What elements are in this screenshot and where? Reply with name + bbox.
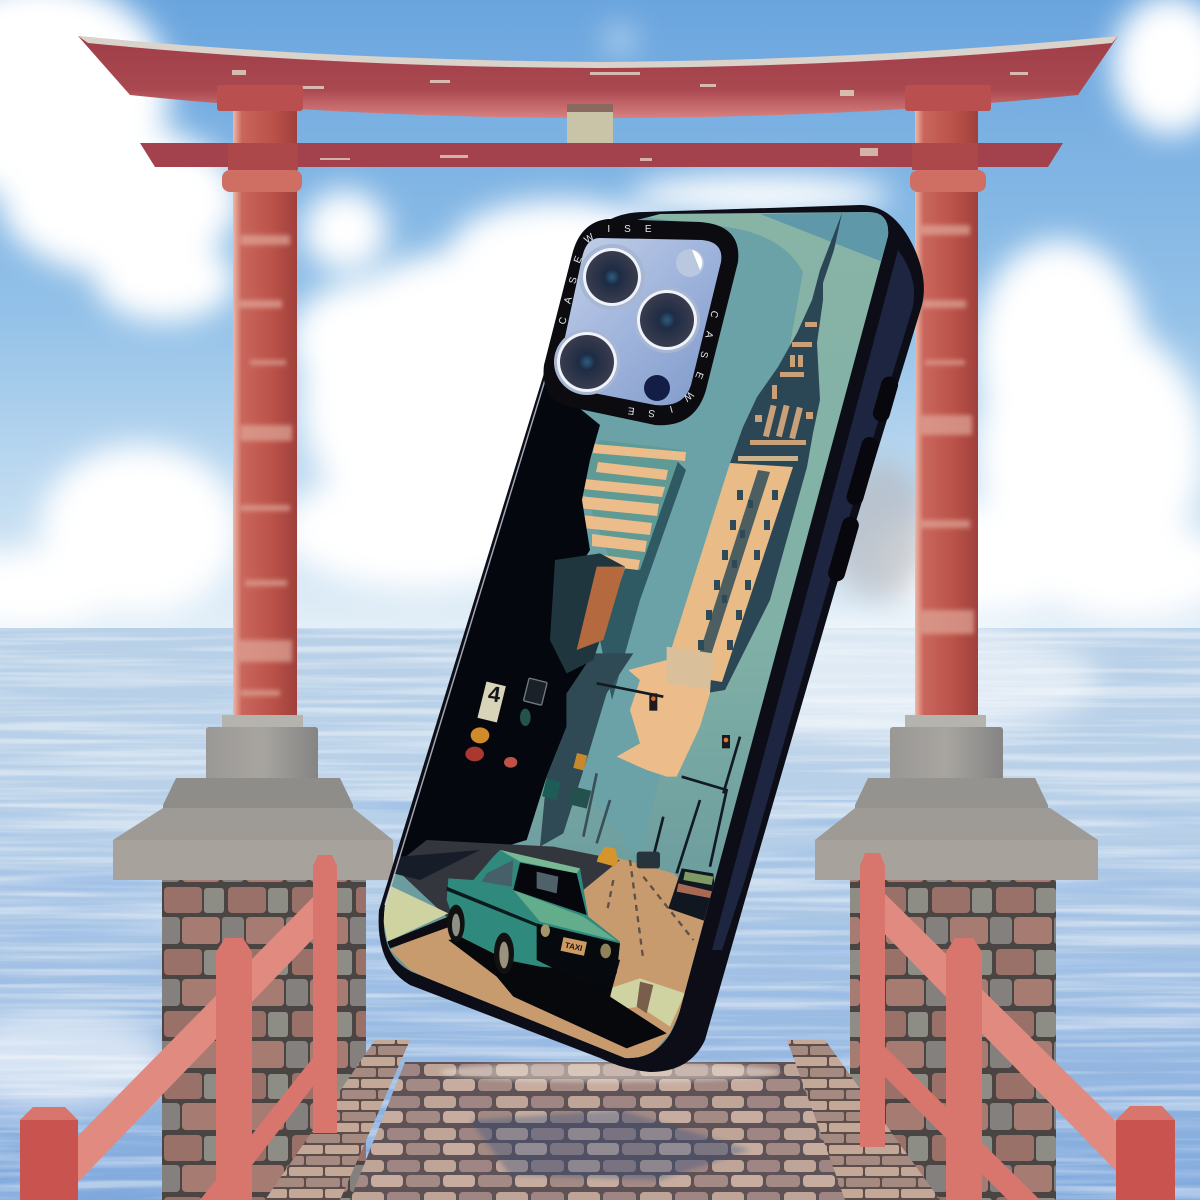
lower beam bbox=[140, 143, 1063, 167]
case body bbox=[379, 205, 924, 1072]
brand text on island: CASEWISE bbox=[559, 225, 652, 324]
art: distant striped building bbox=[578, 440, 686, 700]
centre strut bbox=[567, 104, 613, 143]
brand text on island bbox=[559, 225, 718, 418]
case side reflection bbox=[712, 250, 914, 950]
camera island bbox=[544, 219, 738, 426]
art: teal car: TAXI bbox=[564, 941, 583, 953]
art: teal car bbox=[446, 850, 620, 974]
sky background bbox=[0, 0, 1200, 630]
stone walkway bbox=[265, 1040, 940, 1200]
right stone base bbox=[815, 715, 1098, 1200]
art: dark building silhouette bbox=[398, 382, 600, 860]
pillar caps bbox=[217, 85, 991, 192]
art: dark red car bbox=[668, 868, 715, 922]
art: sunlit tan blocks bbox=[617, 653, 712, 777]
art: main tower bbox=[664, 213, 842, 700]
art: blue sky shapes bbox=[560, 212, 890, 860]
brand text on island: CASEWISE bbox=[628, 311, 718, 418]
art: teal car shadow bbox=[448, 927, 667, 1048]
art: yellow taxi in distance bbox=[597, 847, 660, 868]
grey cloud shadow behind phone bbox=[830, 460, 930, 600]
phone case bbox=[378, 205, 924, 1072]
clouds bbox=[0, 0, 1200, 630]
camera plate bbox=[558, 238, 721, 405]
right pillar bbox=[915, 100, 978, 720]
flash bbox=[676, 249, 704, 277]
left stone base bbox=[113, 715, 393, 1200]
lens: bottom bbox=[554, 329, 620, 395]
art: street bbox=[390, 857, 720, 1060]
side buttons bbox=[826, 375, 900, 583]
top beam bbox=[78, 36, 1118, 118]
phone artwork: pixel city bbox=[370, 205, 900, 1065]
art: sheen edge bbox=[385, 380, 545, 905]
torii gate bbox=[78, 36, 1118, 720]
sensor bbox=[644, 375, 670, 401]
lens: right bbox=[634, 287, 700, 353]
right railing bbox=[860, 853, 1175, 1200]
art: shop signs bbox=[465, 678, 591, 809]
art: shop signs: 4 bbox=[487, 681, 503, 708]
left railing bbox=[20, 855, 337, 1200]
left pillar bbox=[233, 100, 297, 720]
art: road markings bbox=[607, 860, 693, 960]
art: traffic lights and poles bbox=[583, 683, 740, 873]
lens: top bbox=[579, 244, 645, 310]
sea bbox=[0, 620, 1200, 1200]
art: lower tan haze, street canyon, car bbox=[370, 380, 740, 1060]
art: pale sidewalks bbox=[383, 883, 448, 942]
